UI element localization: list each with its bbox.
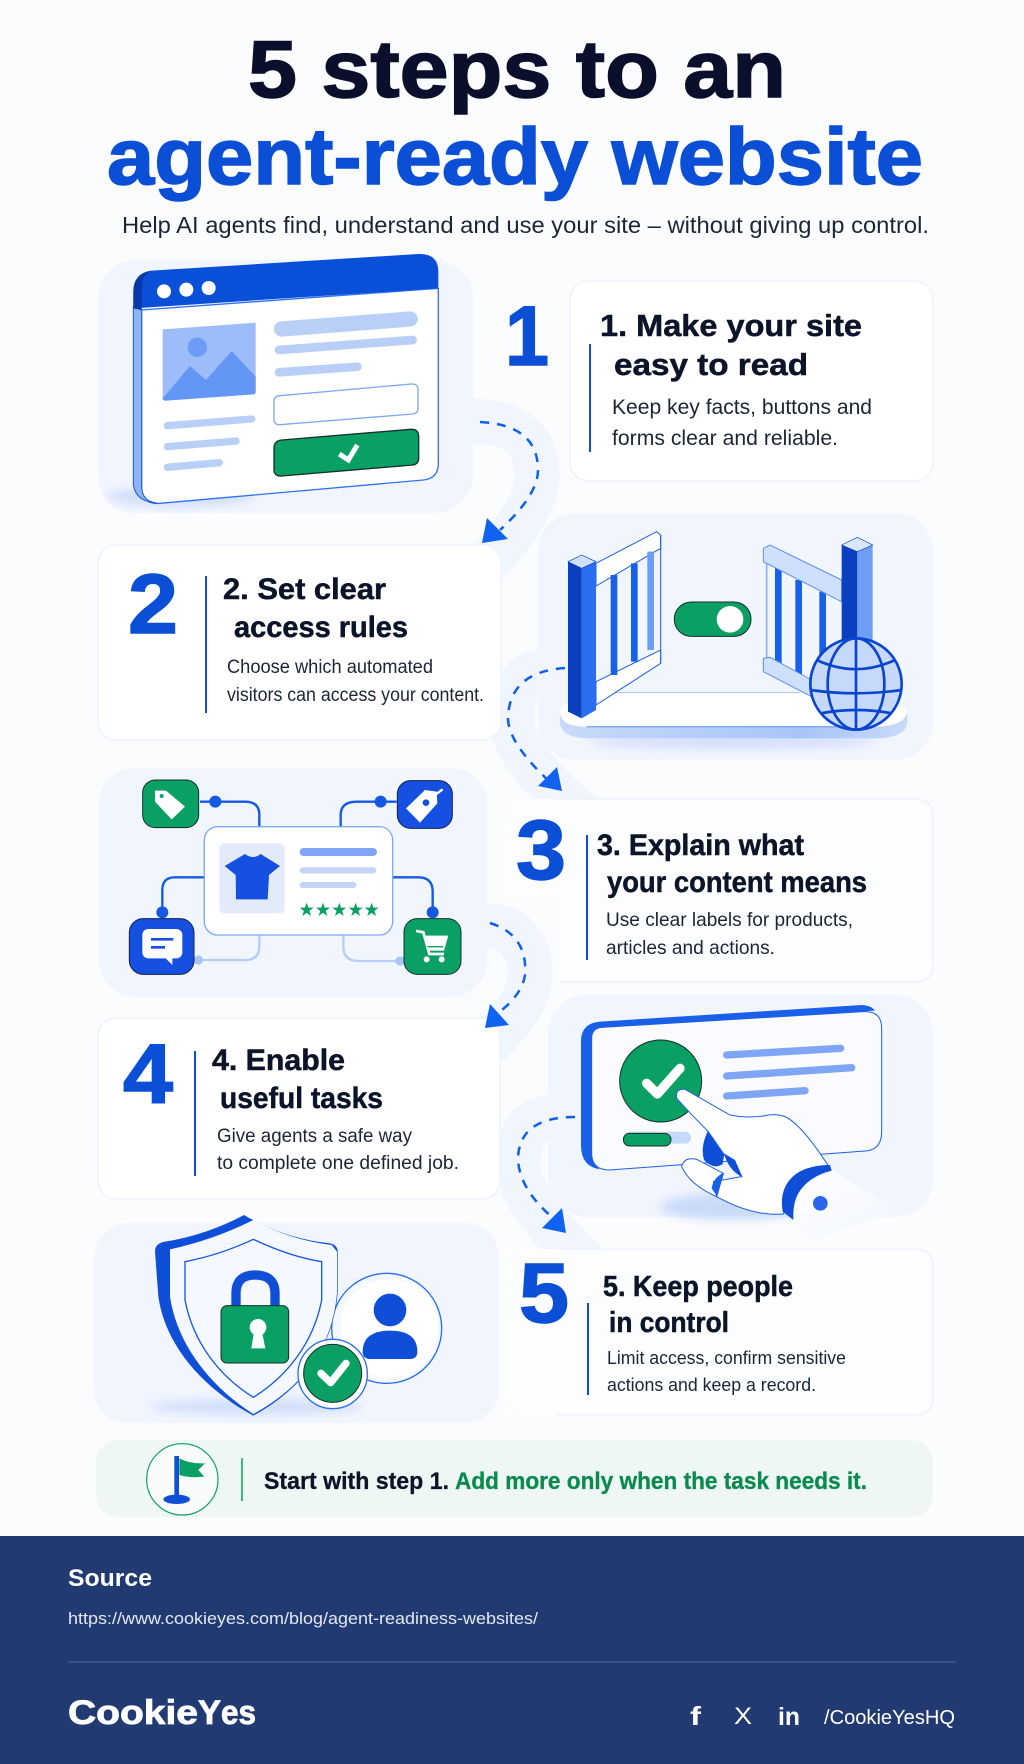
panel: step 1 card: forms clear and reliable. bbox=[612, 427, 838, 450]
panel: step 2 card: visitors can access your content. bbox=[227, 685, 484, 706]
arrow: step 1 to 2 bbox=[480, 422, 538, 543]
arrow: step 3 to 4 bbox=[485, 923, 525, 1028]
arrow: step 4 to 5 bbox=[518, 1117, 575, 1233]
arrow: step 2 to 3 bbox=[508, 668, 565, 791]
icon: flag bbox=[147, 1444, 218, 1515]
social icons and handle: in bbox=[778, 1703, 800, 1731]
social icons and handle bbox=[690, 1701, 955, 1731]
title: 5 steps to an bbox=[248, 25, 786, 115]
source url: https://www.cookieyes.com/blog/agent-readiness-websites/ bbox=[68, 1609, 538, 1628]
panel: step 1 card: 1. Make your site bbox=[600, 308, 862, 343]
title: agent-ready website bbox=[107, 112, 923, 201]
source heading: Source bbox=[68, 1565, 152, 1592]
panel: step 3 card: articles and actions. bbox=[606, 937, 775, 959]
panel: step 5 card bbox=[505, 1249, 933, 1415]
logo: Cookie bbox=[68, 1694, 198, 1732]
illustration: browser window bbox=[107, 254, 438, 506]
panel: step 3 card: Use clear labels for products, bbox=[606, 909, 853, 931]
panel: step 5 card: 5. Keep people bbox=[603, 1271, 793, 1303]
panel: step 1 card: easy to read bbox=[614, 347, 808, 382]
panel: step 4 card: Give agents a safe way bbox=[217, 1126, 412, 1147]
panel: illustration backgrounds bbox=[94, 260, 933, 1423]
number 5: 5 bbox=[519, 1246, 569, 1340]
number 2: 2 bbox=[128, 557, 178, 651]
panel: step 2 card bbox=[98, 545, 501, 740]
illustration: product data card bbox=[129, 780, 461, 974]
illustration: gate with toggle and globe bbox=[560, 532, 907, 748]
logo: es bbox=[221, 1694, 256, 1732]
callout: start with step 1 bbox=[96, 1440, 933, 1517]
panel: step 5 card: in control bbox=[609, 1307, 729, 1339]
number 3: 3 bbox=[516, 803, 566, 897]
footer panel bbox=[0, 1536, 1024, 1764]
illustration: shield, lock and person bbox=[150, 1215, 442, 1416]
panel: step 2 card: Choose which automated bbox=[227, 657, 433, 678]
social icons and handle: f bbox=[690, 1701, 701, 1731]
panel: step 2 card: access rules bbox=[234, 611, 408, 644]
subtitle: Help AI agents find, understand and use your site – without giving up control. bbox=[122, 212, 929, 238]
number 4: 4 bbox=[123, 1027, 173, 1121]
panel: step 1 card bbox=[570, 281, 933, 481]
title bbox=[107, 25, 923, 201]
panel: step 5 card: actions and keep a record. bbox=[607, 1374, 816, 1395]
social icons and handle: /CookieYesHQ bbox=[824, 1707, 955, 1729]
callout: start with step 1: Add more only when the task needs it. bbox=[455, 1468, 867, 1495]
callout: start with step 1: Start with step 1. bbox=[264, 1468, 449, 1495]
panel: step 4 card bbox=[98, 1018, 500, 1199]
logo bbox=[68, 1694, 256, 1732]
panel: step 3 card: 3. Explain what bbox=[597, 829, 804, 862]
panel: step 5 card: Limit access, confirm sensitive bbox=[607, 1347, 846, 1368]
panel: step 4 card: useful tasks bbox=[220, 1082, 383, 1115]
panel: step 4 card: to complete one defined job. bbox=[217, 1153, 459, 1174]
number 1: 1 bbox=[505, 289, 549, 383]
panel: step 3 card bbox=[505, 799, 933, 982]
illustration: robot hand confirming task bbox=[581, 1005, 897, 1242]
social icons and handle: X bbox=[734, 1703, 752, 1730]
logo: Y bbox=[198, 1694, 221, 1732]
panel: step 1 card: Keep key facts, buttons and bbox=[612, 396, 872, 419]
panel: step 4 card: 4. Enable bbox=[212, 1044, 345, 1077]
panel: step 2 card: 2. Set clear bbox=[223, 573, 386, 606]
panel: step 3 card: your content means bbox=[607, 866, 867, 899]
